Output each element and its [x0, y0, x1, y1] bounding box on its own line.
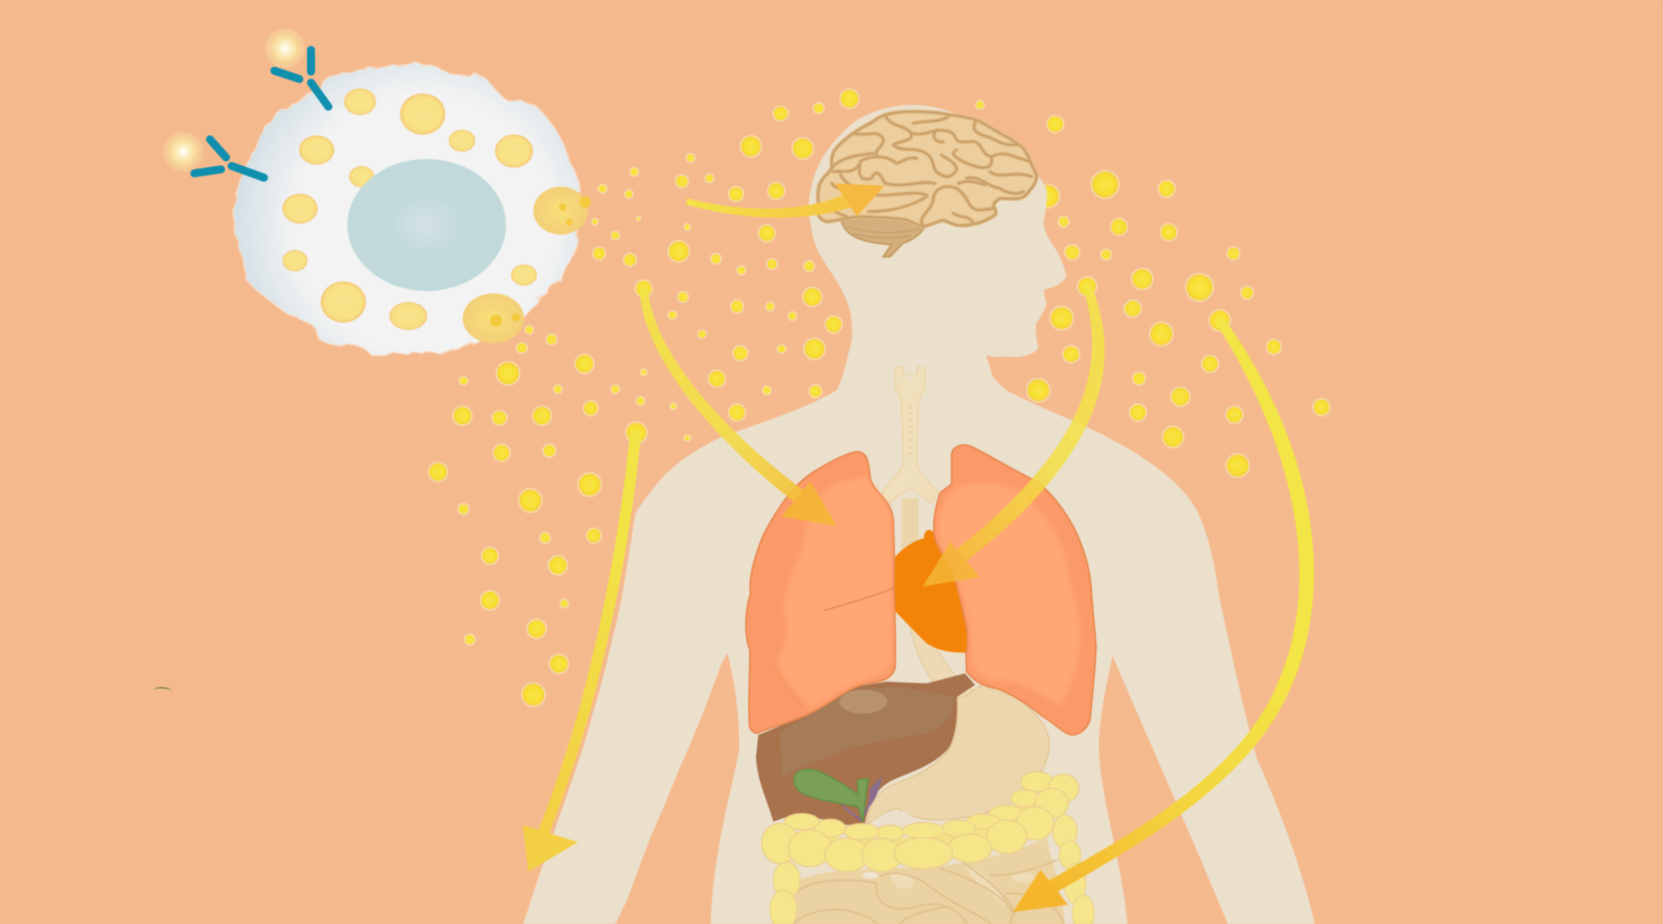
transverse colon [762, 772, 1079, 872]
left lung [746, 452, 895, 733]
descending colon [1053, 815, 1094, 924]
arrow: to intestine [1013, 318, 1314, 912]
antibody: left [194, 139, 264, 178]
ascending colon [770, 862, 800, 924]
allergen glow: left [163, 132, 203, 172]
large intestine [762, 772, 1094, 924]
arrow: to lungs [640, 288, 837, 526]
released yellow particles [428, 89, 1330, 706]
degranulating vesicles [463, 187, 591, 343]
lungs [746, 445, 1096, 735]
speck [153, 687, 173, 690]
liver [756, 673, 975, 825]
human body silhouette [523, 105, 1315, 924]
brain [818, 112, 1037, 257]
nucleus [347, 159, 506, 291]
stomach [867, 683, 1049, 825]
right lung [934, 445, 1096, 735]
heart [894, 530, 973, 653]
esophagus [910, 627, 973, 708]
cerebrum [818, 112, 1037, 227]
allergen glow: upper [265, 28, 305, 68]
internal organs [746, 367, 1096, 924]
small intestine [793, 837, 1065, 924]
arrow: to lower body [523, 437, 635, 872]
trachea [882, 367, 938, 553]
granules [282, 88, 537, 330]
cell membrane [233, 63, 580, 357]
antibody: upper [274, 50, 328, 107]
white immune cell [163, 28, 591, 357]
cerebellum [842, 210, 925, 257]
arrow: to heart [923, 285, 1105, 587]
arrow: to brain [686, 183, 885, 218]
gallbladder [794, 769, 882, 822]
